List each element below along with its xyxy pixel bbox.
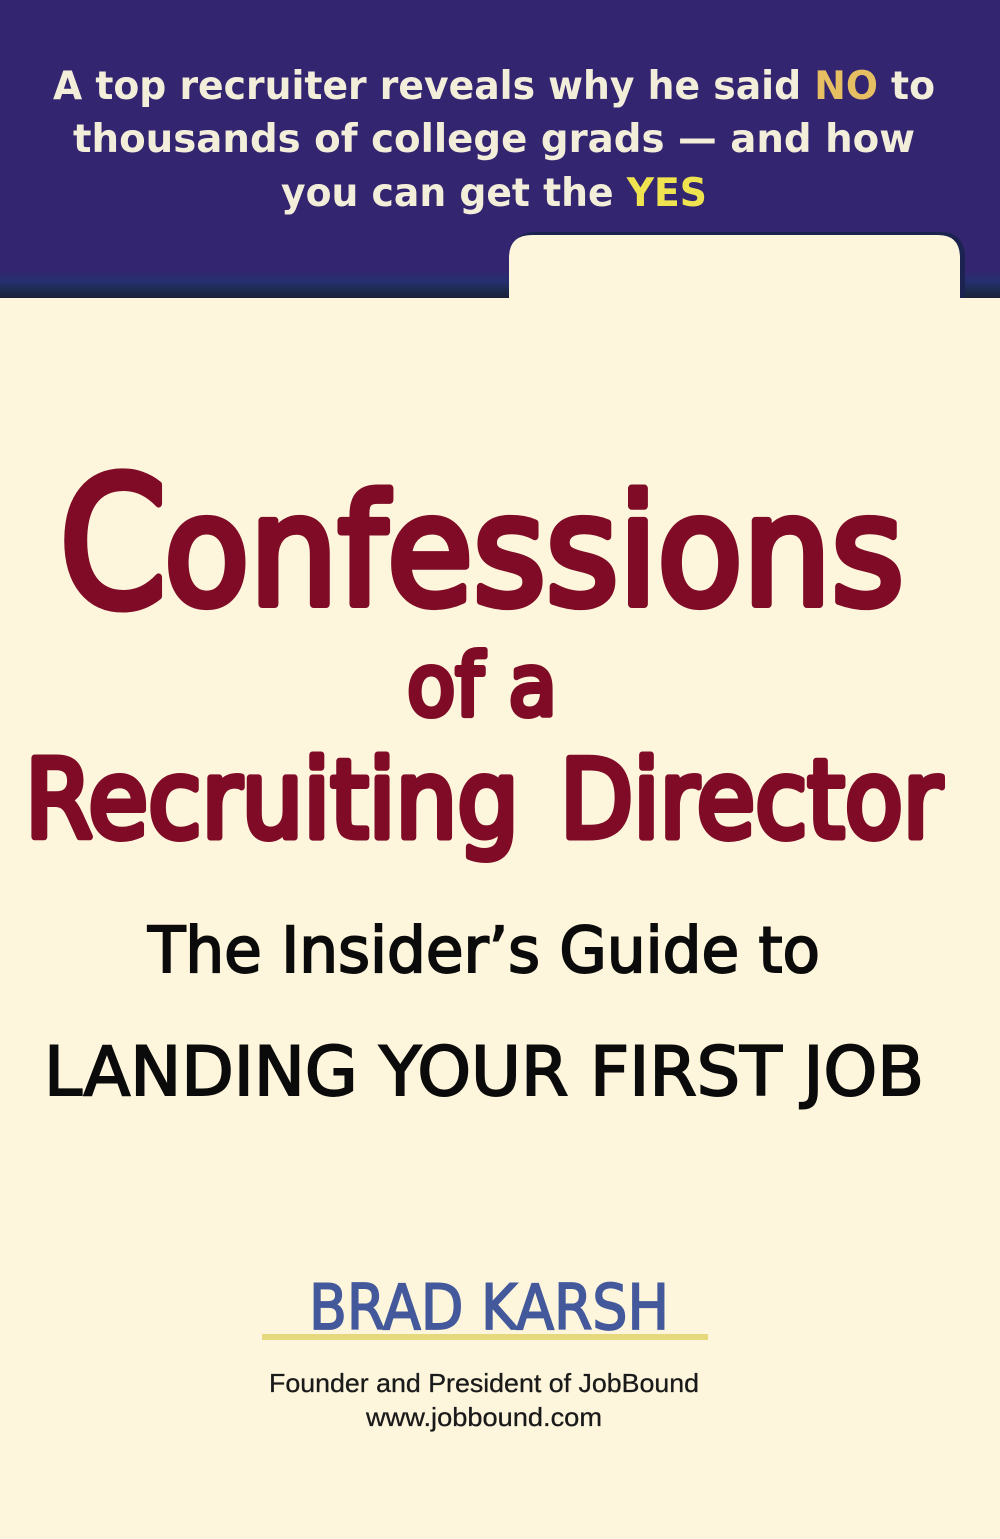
author name: BRAD KARSH — [309, 1271, 669, 1344]
title: Confessions — [59, 440, 904, 649]
title: Confessions: onfessions — [164, 463, 904, 640]
title: Recruiting Director — [25, 738, 943, 863]
subtitle: Landing your first job: LANDING YOUR FIRST JOB — [44, 1033, 924, 1112]
author description — [269, 1368, 699, 1432]
author underline — [262, 1334, 708, 1340]
folder tab — [509, 232, 965, 298]
title: Recruiting Director: Director — [560, 738, 943, 863]
author description: Founder and President of JobBound — [269, 1368, 699, 1398]
panel: navy header band — [0, 0, 1000, 298]
title: Confessions: C — [59, 440, 167, 649]
tagline text: thousands of college grads — and how — [73, 117, 915, 162]
tagline text: A top recruiter reveals why he said NO to — [53, 64, 935, 109]
title: of a: of a — [407, 636, 557, 736]
title: Recruiting Director: Recruiting — [25, 738, 519, 863]
tagline text — [53, 64, 935, 216]
tagline text: you can get the YES — [281, 171, 707, 216]
author description: www.jobbound.com — [365, 1402, 602, 1432]
subtitle: The Insider's Guide to: The Insider’s Guide to — [147, 914, 820, 987]
